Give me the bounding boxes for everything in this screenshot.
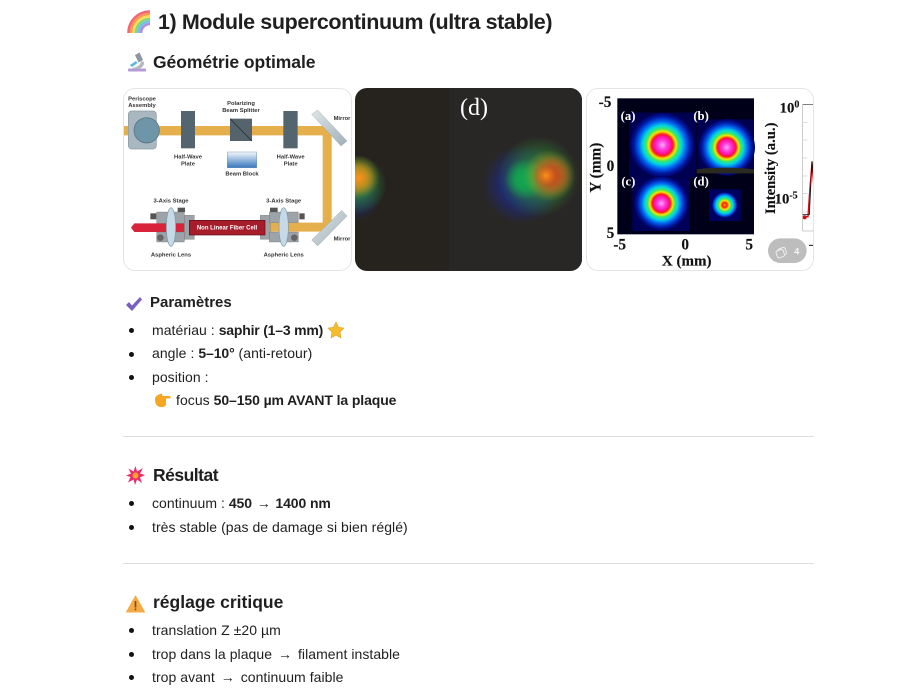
half-wave plates: Plate bbox=[181, 161, 196, 167]
title bbox=[127, 10, 552, 34]
heading text: réglage critique bbox=[153, 592, 283, 612]
half-wave plates bbox=[174, 111, 305, 167]
half-wave plates: Half-Wave bbox=[174, 154, 203, 160]
left beam spot bbox=[328, 155, 387, 220]
section: résultat bbox=[126, 465, 408, 535]
panel: optical setup diagram bbox=[123, 88, 352, 271]
heading text: Géométrie optimale bbox=[153, 52, 315, 72]
left chart axes: -5 bbox=[613, 236, 626, 253]
right chart: 10 bbox=[780, 101, 794, 117]
left chart axes: 5 bbox=[607, 225, 615, 242]
left chart axes: -5 bbox=[599, 94, 612, 111]
right chart: -5 bbox=[789, 190, 798, 201]
bullet list: matériau : saphir (1–3 mm) bbox=[152, 322, 323, 338]
image gallery bbox=[123, 88, 814, 271]
periscope assembly bbox=[128, 96, 159, 149]
title text: 1) Module supercontinuum (ultra stable) bbox=[158, 10, 552, 34]
2D intensity maps: (a) bbox=[621, 109, 635, 123]
right 3-axis stage: Aspheric Lens bbox=[264, 253, 304, 259]
bullet list: focus 50–150 µm AVANT la plaque bbox=[176, 392, 396, 408]
bullet list: translation Z ±20 µm bbox=[152, 622, 281, 638]
image count badge bbox=[768, 238, 807, 263]
left chart axes: 0 bbox=[607, 158, 615, 175]
left chart axes: X (mm) bbox=[662, 253, 711, 269]
left 3-axis stage: Aspheric Lens bbox=[151, 253, 191, 259]
icon: pointing hand bbox=[155, 394, 171, 408]
right chart: Intensity (a.u.) bbox=[763, 122, 779, 214]
mirrors bbox=[312, 110, 351, 246]
bullet list: trop dans la plaque → filament instable bbox=[152, 646, 400, 662]
beam splitter bbox=[222, 101, 261, 141]
mirrors: Mirror bbox=[334, 237, 351, 243]
left chart axes: Y (mm) bbox=[587, 143, 604, 193]
beam splitter: Polarizing bbox=[227, 101, 255, 107]
image count badge: 4 bbox=[794, 247, 800, 257]
icon: check mark bbox=[126, 297, 142, 311]
fiber cell: Non Linear Fiber Cell bbox=[197, 226, 258, 232]
beam block: Beam Block bbox=[225, 172, 259, 178]
heading: géométrie optimale bbox=[128, 52, 315, 72]
half-wave plates: Half-Wave bbox=[277, 154, 305, 160]
2D intensity maps: (d) bbox=[693, 174, 709, 188]
panel: beam spots photo bbox=[355, 88, 582, 271]
periscope assembly: Assembly bbox=[128, 103, 157, 109]
mirrors: Mirror bbox=[334, 116, 351, 122]
section: réglage critique bbox=[126, 592, 400, 685]
bullet list: trop avant → continuum faible bbox=[152, 669, 343, 685]
left 3-axis stage: 3-Axis Stage bbox=[154, 198, 189, 204]
right 3-axis stage bbox=[260, 198, 305, 259]
icon: star bbox=[328, 322, 344, 338]
2D intensity maps: (b) bbox=[693, 109, 709, 123]
right beam spot bbox=[482, 136, 579, 224]
bullet list bbox=[129, 622, 400, 685]
fiber cell bbox=[189, 220, 265, 235]
left chart axes: 0 bbox=[681, 236, 689, 253]
heading text: Résultat bbox=[153, 465, 218, 485]
bullet list: angle : 5–10° (anti-retour) bbox=[152, 345, 312, 361]
right chart bbox=[763, 100, 799, 214]
beam block bbox=[225, 152, 259, 178]
heading text: Paramètres bbox=[150, 294, 232, 311]
periscope assembly: Periscope bbox=[128, 96, 157, 102]
bullet list: très stable (pas de damage si bien réglé) bbox=[152, 519, 408, 535]
right chart plot area bbox=[803, 104, 815, 245]
icon: rainbow bbox=[127, 10, 150, 33]
2D intensity maps bbox=[617, 98, 755, 234]
right chart: 10 bbox=[775, 191, 789, 207]
icon: warning bbox=[126, 596, 145, 612]
panel: beam profile plots bbox=[586, 88, 814, 271]
left chart axes bbox=[587, 94, 753, 269]
icon: explosion bbox=[126, 466, 145, 485]
section: paramètres bbox=[126, 294, 396, 408]
beam splitter: Beam Splitter bbox=[222, 108, 261, 114]
left chart axes: 5 bbox=[745, 236, 753, 253]
half-wave plates: Plate bbox=[284, 161, 298, 167]
2D intensity maps: (c) bbox=[621, 174, 635, 188]
label (d): (d) bbox=[460, 95, 488, 121]
left 3-axis stage bbox=[150, 198, 194, 259]
icon: microscope bbox=[128, 52, 146, 72]
bullet list bbox=[129, 495, 408, 535]
right 3-axis stage: 3-Axis Stage bbox=[266, 198, 302, 204]
bullet list: continuum : 450 → 1400 nm bbox=[152, 495, 331, 511]
bullet list: position : bbox=[152, 369, 209, 385]
orange beam path bbox=[124, 126, 332, 232]
red beam bbox=[131, 223, 191, 232]
bullet list bbox=[129, 322, 396, 408]
right chart: 0 bbox=[794, 100, 799, 111]
